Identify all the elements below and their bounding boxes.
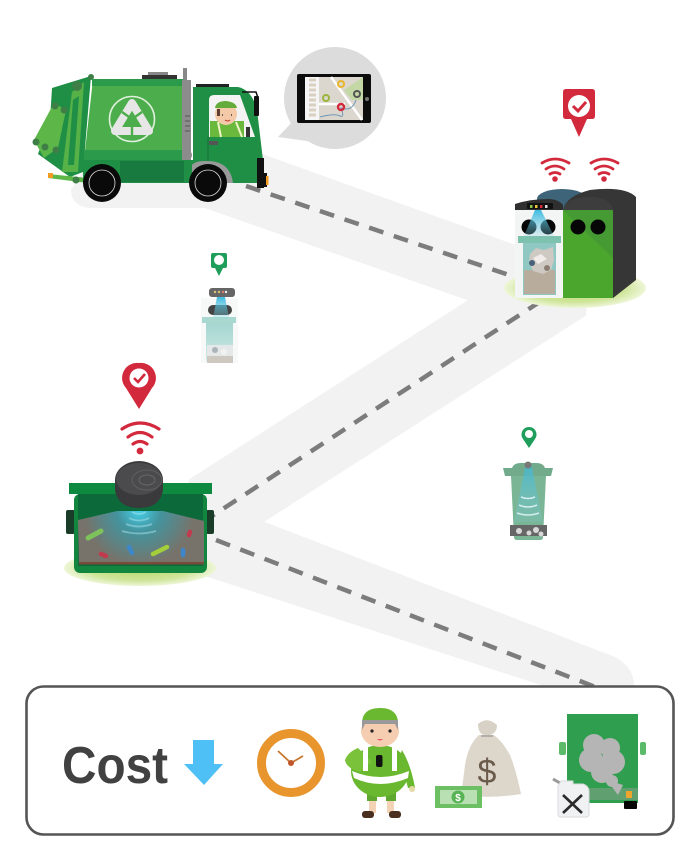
road <box>72 155 633 700</box>
icon: truck rear with smoke <box>553 714 646 817</box>
recycling logo <box>110 96 154 142</box>
bumper <box>257 158 268 188</box>
tablet map <box>297 74 371 123</box>
red square pin <box>563 89 595 137</box>
mirror <box>242 92 259 116</box>
icon: clock <box>262 734 320 792</box>
speech bubble with tablet <box>278 47 386 149</box>
heading: cost: Cost <box>62 737 168 795</box>
wheelie bin right <box>503 462 553 540</box>
cost panel <box>26 686 674 834</box>
red round pin <box>122 363 156 409</box>
smart bin station <box>504 189 646 308</box>
green bin <box>563 189 636 298</box>
exhaust column <box>182 68 192 160</box>
driver <box>210 101 250 137</box>
sensor dome <box>115 461 163 508</box>
wheels <box>83 164 227 202</box>
cargo body <box>83 72 195 183</box>
wifi signal left <box>122 423 159 453</box>
inner wheelie bin <box>518 236 561 295</box>
icon: down arrow <box>184 740 223 785</box>
cab <box>192 84 263 183</box>
wifi signals right <box>542 159 618 180</box>
green square pin <box>211 253 227 276</box>
icon: worker <box>345 708 415 818</box>
dumpster contents <box>78 511 204 564</box>
dumpster with sensor <box>64 461 216 586</box>
small bin left <box>201 288 238 363</box>
icon: money: $ <box>478 753 497 791</box>
hopper <box>32 74 94 184</box>
dashed route <box>212 186 598 688</box>
green round pin <box>522 427 536 448</box>
sensor lid <box>515 199 563 236</box>
garbage truck <box>32 68 268 202</box>
icon: money <box>435 720 521 808</box>
icon: money: $ <box>455 793 461 804</box>
